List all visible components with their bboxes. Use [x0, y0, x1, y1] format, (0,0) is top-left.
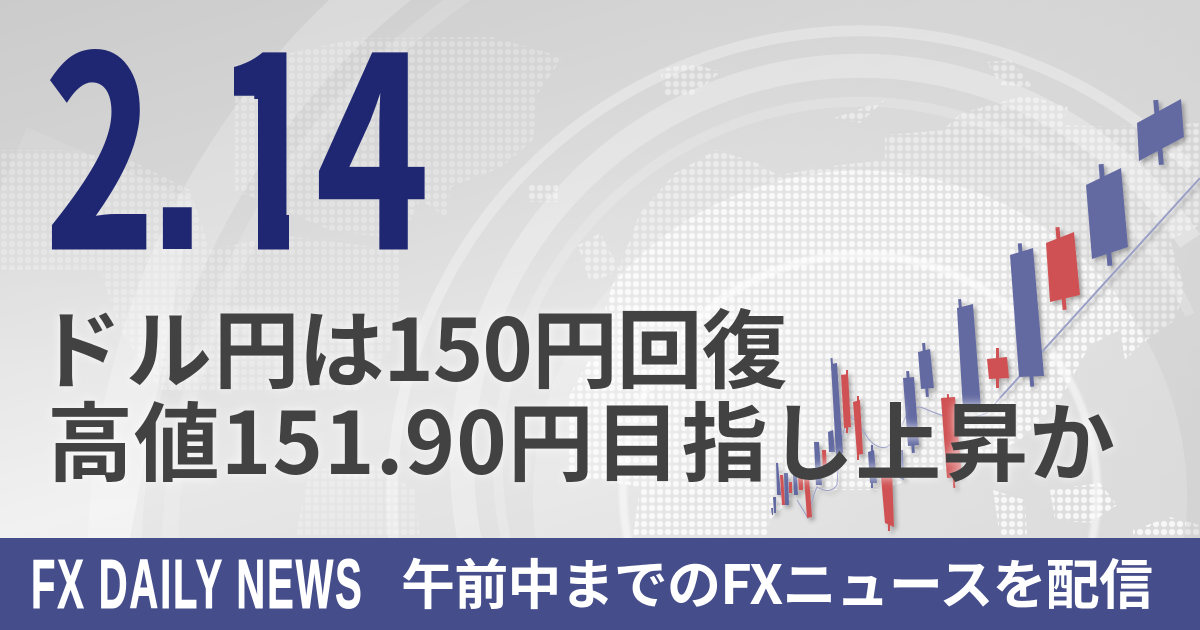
footer tagline: 午前中までのFXニュースを配信: [401, 541, 1153, 620]
footer label: FX DAILY NEWS: FX DAILY NEWS: [31, 545, 364, 624]
headline: 高値151.90円目指し上昇か: [47, 374, 1115, 499]
date: 2.14: .: [149, 0, 206, 308]
footer band: [0, 538, 1200, 630]
candlestick chart: [771, 99, 1200, 531]
headline: ドル円は150円回復: [36, 281, 786, 406]
date: 2.14: [50, 49, 425, 250]
trend line: [1000, 178, 1200, 398]
blue candles: [771, 99, 1184, 515]
red candles: [780, 227, 1080, 531]
background: dotted world map: [1, 37, 1199, 535]
headline: [36, 281, 1115, 499]
moving average curve: [797, 398, 1000, 518]
